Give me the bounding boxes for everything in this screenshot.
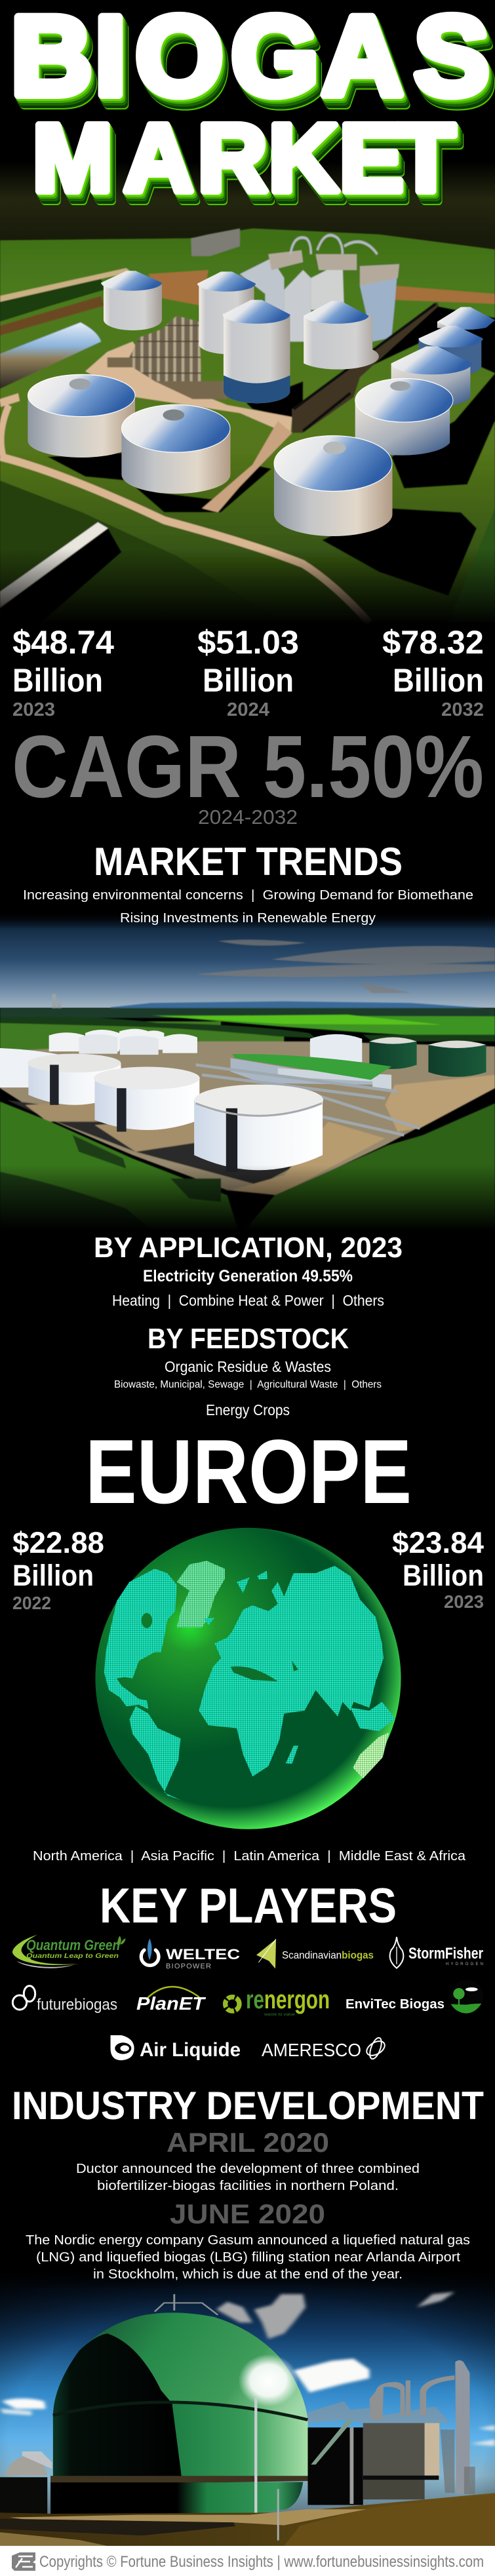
logo: Future Biogas <box>12 1986 117 2014</box>
logo: Scandinavian Biogas <box>256 1939 374 1968</box>
stat: Europe 2023: 2023 <box>444 1591 484 1612</box>
dirt yard <box>148 270 495 306</box>
base ring <box>50 2476 309 2482</box>
small rear dome <box>0 2451 52 2514</box>
green roofed building <box>230 1054 391 1090</box>
ground <box>0 2493 495 2546</box>
stat: Europe 2022: 2022 <box>12 1593 51 1613</box>
yard pavement <box>85 342 292 435</box>
lower dome lit side <box>172 2402 307 2476</box>
walkway rails <box>307 2401 450 2423</box>
logo: Quantum Green: Quantum Leap to Green <box>26 1953 119 1960</box>
logo: EnviTec Biogas <box>346 1980 483 2014</box>
text: market trends list: Increasing environmental concerns | Growing Demand for Biomethane <box>23 888 473 903</box>
South America <box>129 1706 180 1800</box>
logo: Renergon <box>226 1985 330 2017</box>
stat 2024: Billion <box>203 662 294 699</box>
text: April 2020 development <box>76 2162 420 2193</box>
upper right white tank <box>310 1034 362 1062</box>
logo: Quantum Green <box>12 1935 126 1968</box>
title: MARKET <box>33 105 455 212</box>
panel: by feedstock <box>114 1323 382 1418</box>
dome band <box>53 2402 307 2420</box>
stat 2023: $48.74 <box>12 624 114 661</box>
dome bright reflection <box>239 2354 298 2407</box>
foreground right bushes <box>240 1103 495 1236</box>
panel: by application <box>94 1232 403 1309</box>
storage tank A <box>28 374 135 458</box>
text: April 2020 development: biofertilizer-biogas facilities in northern Poland. <box>97 2179 399 2193</box>
stack <box>455 2360 469 2494</box>
text: June 2020 development: The Nordic energy company Gasum announced a liquefied natural gas <box>26 2233 470 2248</box>
logo: Future Biogas: futurebiogas <box>37 1996 117 2014</box>
stat: Europe 2022 <box>12 1526 104 1613</box>
tall tank H <box>101 271 162 330</box>
rear silver tanks cluster <box>240 235 399 342</box>
gravel <box>9 2509 366 2526</box>
title <box>10 0 489 212</box>
Greenland <box>177 1561 225 1628</box>
access roads <box>0 397 369 623</box>
Australia <box>353 1732 389 1778</box>
panel: market size figures <box>12 624 484 720</box>
tank T2 <box>94 1067 200 1132</box>
ladder frame <box>441 2430 475 2494</box>
exhaust pipes <box>369 2375 454 2420</box>
logo: Air Liquide <box>111 2035 241 2061</box>
logo: WELTEC Biopower: BIOPOWER <box>166 1962 211 1970</box>
text: market trends list <box>23 888 473 926</box>
tall tank J <box>222 300 290 403</box>
CAGR period: 2024-2032 <box>198 806 298 829</box>
storage tank G <box>437 307 495 330</box>
tall tank I <box>197 271 256 354</box>
stat: Europe 2023: $23.84 <box>392 1526 484 1559</box>
text: April 2020 development: Ductor announced the development of three combined <box>76 2162 420 2176</box>
lower left dark field <box>0 480 284 623</box>
plant ground <box>0 1042 495 1195</box>
text: June 2020 development: (LNG) and liquefied biogas (LBG) filling station near Arlanda Airport <box>36 2250 460 2265</box>
sub segments: Biowaste, Municipal, Sewage | Agricultural Waste | Others <box>114 1379 382 1390</box>
South East Asia <box>350 1702 395 1731</box>
small rear tanks <box>49 1029 197 1055</box>
stat 2032: $78.32 <box>382 624 484 661</box>
tank T1 <box>194 1085 323 1172</box>
leading segment: Electricity Generation 49.55% <box>143 1267 353 1285</box>
pipework <box>196 1064 420 1135</box>
staircase <box>311 2420 353 2465</box>
logo: Ameresco: AMERESCO <box>262 2040 361 2060</box>
logo: Quantum Green: Quantum Green <box>26 1937 120 1953</box>
heading: key players: KEY PLAYERS <box>100 1878 397 1933</box>
chimneys <box>52 994 61 1017</box>
logo: Renergon: renergon <box>246 1985 330 2014</box>
green tank one <box>369 1037 417 1069</box>
storage tank D <box>355 378 453 456</box>
clouds <box>0 2292 495 2446</box>
tree line <box>0 1017 495 1042</box>
Eurasia and Africa <box>199 1566 384 1776</box>
stat 2032 <box>382 624 484 720</box>
footer <box>0 2546 495 2576</box>
text: market trends list: Rising Investments in Renewable Energy <box>120 911 376 926</box>
back buildings <box>191 228 240 256</box>
segment one: Organic Residue & Wastes <box>165 1358 331 1375</box>
logo: Renergon: waste to value <box>264 2013 296 2017</box>
Mediterranean and Caspian <box>230 1661 298 1681</box>
stat 2024 <box>197 624 299 720</box>
storage tank E <box>391 346 472 407</box>
field <box>0 228 495 623</box>
lower dome wall <box>50 2482 303 2514</box>
logo: Air Liquide: Air Liquide <box>140 2039 241 2061</box>
logo: WELTEC Biopower: WELTEC <box>166 1946 240 1962</box>
logo: PlanET: PlanET <box>136 1993 207 2014</box>
stat 2032: Billion <box>393 662 484 699</box>
dome shadow <box>53 2333 182 2476</box>
panel: biogas dome photo <box>0 2266 495 2546</box>
panel: market trends photo <box>0 912 495 1242</box>
white shed bottom left <box>0 522 108 608</box>
date: April 2020: APRIL 2020 <box>167 2127 329 2158</box>
icon: Fortune Business Insights mark <box>12 2552 35 2571</box>
text: June 2020 development <box>26 2233 470 2282</box>
hedge and dirt track left <box>0 278 104 322</box>
concrete curb <box>0 2519 235 2535</box>
green tank two <box>428 1040 486 1077</box>
pole <box>254 2398 257 2516</box>
stat: Europe 2023 <box>392 1526 484 1612</box>
horizontal silver tube <box>0 322 101 389</box>
Madagascar <box>286 1746 298 1764</box>
heading: BY APPLICATION, 2023 <box>94 1232 403 1264</box>
logo: StormFisher Hydrogen: HYDROGEN <box>446 1962 483 1966</box>
tall tank K <box>304 301 379 370</box>
stat: Europe 2023: Billion <box>403 1559 484 1592</box>
stat 2023: 2023 <box>12 699 55 720</box>
logo: PlanET <box>136 1987 207 2014</box>
heading: market trends: MARKET TRENDS <box>94 840 403 884</box>
stat 2023 <box>12 624 114 720</box>
storage tank F <box>418 326 483 377</box>
logo: WELTEC Biopower <box>141 1938 240 1970</box>
dark cast shadows <box>47 306 495 596</box>
tank T3 <box>28 1054 121 1105</box>
tank T0 <box>0 1048 63 1087</box>
stat: Europe 2022: Billion <box>12 1559 94 1592</box>
stat 2032: 2032 <box>441 699 484 720</box>
bright fields <box>151 1015 495 1040</box>
panel: hero photo of biogas plant <box>0 0 495 639</box>
panel: key player logos <box>12 1935 483 2061</box>
text: other regions: North America | Asia Pacific | Latin America | Middle East & Africa <box>33 1849 466 1864</box>
Iceland and Svalbard <box>204 1571 267 1625</box>
stat 2024: 2024 <box>227 699 269 720</box>
icon: green dotted globe <box>95 1528 401 1829</box>
storage tank B <box>121 404 230 494</box>
date: June 2020: JUNE 2020 <box>170 2198 325 2229</box>
North America <box>104 1569 177 1709</box>
heading: Europe: EUROPE <box>85 1421 412 1523</box>
stat 2023: Billion <box>12 662 103 699</box>
Hudson Bay <box>142 1613 152 1628</box>
text: June 2020 development: in Stockholm, which is due at the end of the year. <box>93 2267 403 2282</box>
logo: StormFisher Hydrogen <box>390 1937 483 1968</box>
dark industrial building <box>307 2427 363 2505</box>
other segments: Heating | Combine Heat & Power | Others <box>112 1292 384 1309</box>
logo: EnviTec Biogas: EnviTec Biogas <box>346 1997 445 2012</box>
stat: Europe 2022: $22.88 <box>12 1526 104 1559</box>
process machinery <box>127 316 202 391</box>
foreground left grass <box>0 1102 240 1236</box>
heading: BY FEEDSTOCK <box>148 1323 349 1355</box>
dome <box>53 2313 307 2478</box>
dome top rail <box>155 2294 218 2315</box>
segment two: Energy Crops <box>206 1401 290 1418</box>
logo: Scandinavian Biogas: Scandinavianbiogas <box>282 1950 374 1961</box>
diagonal pipe rack <box>292 302 439 433</box>
stat 2024: $51.03 <box>197 624 299 661</box>
clouds <box>196 940 495 993</box>
storage tank C <box>274 436 393 536</box>
horizon hill <box>111 1002 495 1009</box>
